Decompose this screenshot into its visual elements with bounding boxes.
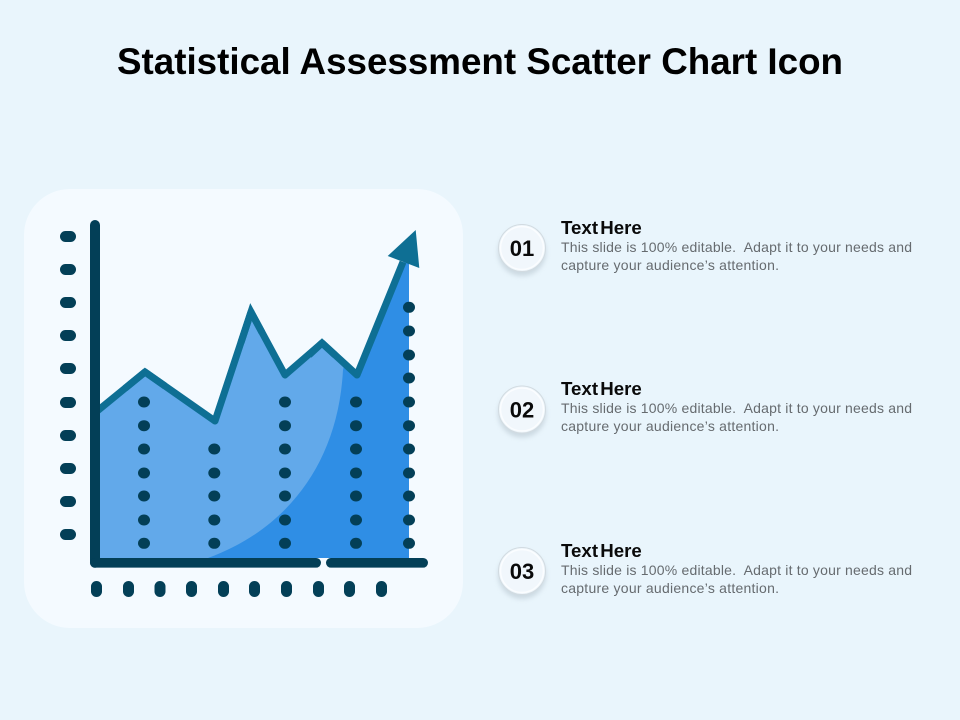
title: Statistical Assessment Scatter Chart Icon [117,41,843,82]
item 03 [498,540,912,596]
light blue area [100,262,409,558]
badge 02: 02 [510,398,534,422]
scatter dots [138,302,415,549]
body text 03 [561,562,912,596]
horizontal axis [90,558,428,568]
body text 01: This slide is 100% editable. Adapt it to your needs and [561,239,912,255]
arrowhead [388,230,419,268]
item 01 [498,217,912,273]
badge 01: 01 [510,236,534,261]
body text 02 [561,400,912,434]
item 02 [498,378,912,434]
body text 01 [561,239,912,273]
heading 03: Text Here [561,540,642,561]
body text 02: This slide is 100% editable. Adapt it to your needs and [561,400,912,416]
badge 03: 03 [510,559,534,584]
chart: scatter area icon [60,225,428,597]
badge 03 [498,548,546,594]
body text 03: capture your audience’s attention. [561,580,779,596]
dark blue area [208,262,409,558]
x-axis tick marks [91,581,387,597]
panel: chart background [24,189,463,628]
trend line [96,262,403,421]
heading 01: Text Here [561,217,642,238]
badge 01 [498,224,546,272]
heading 02: Text Here [561,378,642,399]
body text 02: capture your audience’s attention. [561,418,779,434]
badge 02 [498,386,546,433]
vertical axis [90,225,100,563]
y-axis tick marks [60,231,76,540]
body text 01: capture your audience’s attention. [561,257,779,273]
body text 03: This slide is 100% editable. Adapt it to your needs and [561,562,912,578]
